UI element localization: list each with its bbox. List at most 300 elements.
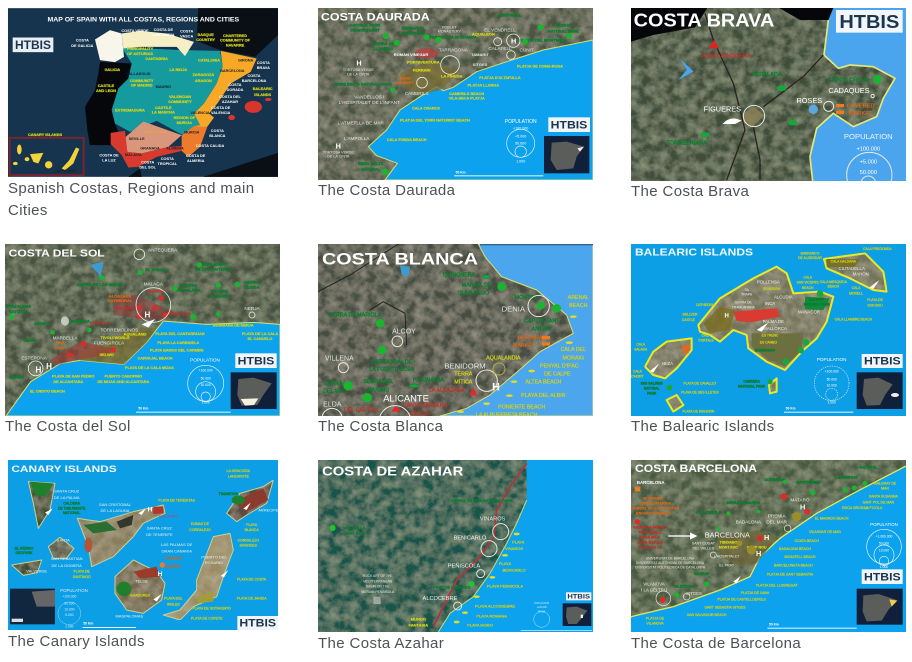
labels: towns: ANTEQUERA	[148, 248, 178, 253]
labels: beaches and parks: CASTLE	[682, 318, 696, 322]
caption: The Costa de Barcelona: The Costa de Barcelona	[631, 635, 801, 652]
labels: beaches and parks: CATHEDRAL	[696, 303, 716, 307]
scale bar	[521, 629, 592, 632]
callout: Barcelona district list: SAGRADA FAMILIA	[633, 526, 667, 530]
labels: attractions and cities: PERALADA	[752, 72, 782, 78]
labels: cities: DE LA GOMERA	[52, 563, 82, 568]
labels: nature parks: CARRASCAL DE	[371, 359, 413, 365]
labels: beaches	[387, 64, 563, 142]
labels: towns: VANDELLOS I	[354, 94, 384, 99]
labels: costas and regions: NAVARRE	[226, 43, 245, 47]
labels: beaches: SAN SALVADOR BEACH	[687, 613, 727, 617]
labels: costas and regions: SEVILLE	[129, 137, 145, 141]
labels: beaches: SANT POL DE MAR	[862, 500, 895, 504]
labels: nature parks: NATIONAL PARK	[738, 385, 766, 389]
labels: nature parks: SES SALINES	[641, 382, 663, 386]
labels: attractions and cities: TORREBRIANA	[666, 140, 707, 146]
icons: park trees	[9, 262, 240, 335]
labels: attractions and cities: +5.000	[860, 160, 877, 166]
labels: costas and regions: LA LUZ	[102, 159, 116, 163]
scale bar: 50 Km	[138, 407, 148, 411]
labels: beaches and parks: CALA PREGONDA	[863, 247, 892, 251]
labels: attractions: LA PINEDA	[441, 73, 462, 78]
labels: costas and regions: VALENCIA	[211, 111, 231, 115]
labels: costas and regions: ALMERIA	[187, 159, 205, 163]
labels: costas and regions: GIRONA	[238, 58, 254, 62]
labels: nature parks: EBRE DELTA NATURAL PARK	[335, 82, 392, 87]
labels: attractions: MARKET	[513, 343, 536, 349]
labels: attractions: AQUALANDIA	[486, 356, 521, 362]
labels: attractions and cities: POPULATION	[844, 132, 893, 141]
icons: hotels and airport: H	[35, 365, 41, 374]
labels: cities: CIUTADELLA	[838, 266, 865, 271]
labels: cities: VALVERDE	[26, 568, 47, 573]
caption: The Costa Azahar: The Costa Azahar	[318, 635, 444, 652]
labels: cities: BENIDORM	[444, 361, 486, 370]
labels: costas and regions: COSTA	[161, 157, 174, 161]
logo: HTBIS	[862, 569, 903, 584]
labels: cities	[423, 517, 506, 602]
labels: nature parks: SIERRA	[9, 374, 24, 379]
scale bar	[83, 622, 136, 628]
labels: nature parks: PARC DE LA MUNTANYA	[430, 34, 477, 39]
labels: nature parks: LLABERIA	[373, 46, 394, 51]
labels: beaches and parks: PLAYA DE CAVALLET	[683, 382, 717, 386]
labels: costas and regions: VALENCIAN	[169, 95, 191, 99]
labels: beaches and parks: ES TRENC	[762, 334, 779, 338]
legend: population	[58, 588, 88, 629]
labels: parks and beaches: EL HIERRO	[15, 546, 34, 550]
inset: Spain locator	[563, 603, 591, 626]
labels: costas and regions: COSTA DE	[211, 106, 231, 110]
labels: attractions and cities: COVERED	[847, 103, 875, 109]
labels: beaches: PLATJA DE CASTELLDEFELS	[717, 598, 767, 602]
city circles	[454, 524, 509, 610]
legend: population	[505, 119, 537, 163]
inset: Canary Islands: LAS PALMAS	[54, 169, 76, 173]
logo: HTBIS: HTBIS	[238, 355, 274, 367]
label: rock art: BASIN ON THE	[366, 585, 390, 589]
labels: beaches: PLAYA MORO	[467, 623, 493, 628]
labels: cities: DENIA	[502, 305, 526, 314]
caption: The Costa Brava: The Costa Brava	[631, 183, 749, 200]
panel: Costa Daurada map	[318, 8, 593, 180]
scale bar	[784, 407, 853, 413]
labels: costas and regions: LA RIOJA	[169, 68, 187, 72]
labels: towns: NERJA	[244, 306, 261, 311]
labels: nature parks: SERRA DEL MONTMELL	[520, 38, 567, 43]
labels: costas and regions: BARCELONA	[220, 69, 245, 73]
labels: nature parks: NATURAL PARK	[804, 303, 830, 307]
legend: population	[188, 357, 224, 405]
labels: nature and heritage: VALL DE LA	[343, 525, 366, 530]
labels: nature parks: TEJEDA	[212, 288, 228, 293]
labels: nature parks: LLEVANT	[809, 298, 824, 302]
labels: beaches: PLATJA DE COMA-RUGA	[517, 64, 563, 68]
legend: population: +100.000	[62, 594, 76, 598]
label: rock art: MEDITERRANEAN	[363, 579, 393, 583]
legend: population: 10.000	[879, 548, 889, 552]
labels: towns: EL VENDRELL	[484, 28, 516, 33]
labels: towns: POBLET	[442, 25, 457, 29]
labels: nature parks: OLERDOLA	[675, 584, 696, 588]
labels: attractions and cities: CAPOS CREUS	[828, 78, 869, 84]
heading: Costa Barcelona: COSTA BARCELONA	[635, 463, 757, 475]
labels: attractions: CATHEDRAL	[108, 298, 133, 303]
labels: attractions: SANTA BARBARA	[403, 403, 447, 409]
labels: attractions: SITGES	[473, 62, 488, 67]
labels: cities: BENICARLO	[454, 535, 487, 541]
inset: Spain locator	[231, 372, 277, 409]
legend: population: POPULATION	[505, 119, 537, 125]
icons: planes and hotels	[45, 503, 251, 602]
labels: beaches: BENICARLO	[502, 568, 526, 573]
labels: beaches: VILASSAR DE MAR	[809, 530, 841, 534]
labels: costas and regions: PRINCIPALITY	[127, 47, 154, 51]
labels: cities: PALMA DE	[763, 319, 784, 324]
labels: nature parks: OLIVA PEGO	[457, 290, 489, 296]
labels: costas and regions: BALEARIC	[253, 87, 273, 91]
inset: Spain locator	[857, 589, 903, 625]
labels: costas and regions: VALENCIA	[190, 111, 210, 115]
labels: beaches and parks: ES CARBO	[760, 340, 777, 344]
legend: population: POPULATION	[534, 602, 549, 605]
labels: cities: SERRA DE	[735, 301, 753, 305]
scale bar	[136, 407, 231, 413]
labels: beaches: PLAYA PENISCOLA	[487, 584, 523, 589]
labels: beaches: BOGATELL BEACH	[784, 555, 816, 559]
labels: nature parks: DE MALAGA	[176, 288, 201, 293]
legend: population: 1.000	[516, 159, 525, 163]
caption: Spanish Costas, Regions and main Cities	[8, 180, 254, 219]
labels: beaches: PONIENTE BEACH	[498, 404, 545, 410]
labels: cities: PREMIA	[768, 514, 786, 519]
labels: nature parks: NATURAL PARK	[349, 23, 381, 28]
labels: cities: BADALONA	[736, 520, 762, 525]
callout: Barcelona district list: UNIVERSITAT AUTONOMA DE BARCELONA	[636, 561, 705, 565]
labels: nature parks: GENAL	[23, 338, 38, 343]
labels: towns: CUNIT	[520, 48, 534, 53]
labels: cities: PUERTO DEL	[201, 555, 227, 560]
labels: cities: IBIZA	[662, 361, 673, 366]
labels: towns: TORTOSA VERDE	[343, 68, 374, 72]
labels: attractions: MARKET	[396, 80, 414, 85]
labels: costas and regions: COSTA	[257, 61, 270, 65]
labels: costas and regions: LA MANCHA	[152, 110, 175, 114]
labels: attractions and cities	[666, 40, 893, 176]
icon: hotels	[336, 37, 516, 151]
labels: beaches and parks: CALA MESQUIDA	[820, 280, 848, 284]
panel: Costa Barcelona map	[631, 460, 906, 632]
labels: costas and regions: COSTA	[211, 129, 224, 133]
heading: map title: MAP OF SPAIN WITH ALL COSTAS, REGIONS AND CITIES	[48, 16, 240, 24]
labels: costas and regions: ALMERIA	[166, 147, 184, 151]
labels: cities	[323, 305, 526, 408]
labels: costas and regions: CANTABRIA	[145, 57, 168, 61]
labels: nature parks	[675, 465, 878, 588]
labels: parks and beaches: CORRALEJO	[238, 539, 259, 543]
labels: nature parks: SERRA	[324, 381, 343, 387]
city circles	[743, 94, 892, 198]
city circles	[656, 525, 791, 606]
legend: population: +1.000.000	[876, 534, 893, 538]
labels: beaches: BURRIANA DE NERJA	[213, 323, 254, 327]
callout: Barcelona district list: UNIVERSITAT POLITECNICA DE CATALUNYA	[635, 566, 706, 570]
labels: towns: FUENGIROLA	[94, 341, 125, 346]
labels: costas and regions: ARAGON	[195, 79, 212, 83]
legend: population: POPULATION	[60, 588, 88, 593]
roads	[705, 13, 823, 180]
legend: population	[534, 602, 550, 627]
labels: beaches: VINAROS	[505, 546, 523, 551]
labels: nature parks: ANTONI	[532, 326, 552, 332]
icons: trees and planes	[650, 280, 879, 391]
labels: cities: MALLORCA	[763, 326, 787, 331]
labels: cities: ALCOY	[392, 329, 416, 336]
legend: population: +100.000	[537, 607, 547, 609]
legend: population: 1.000	[880, 565, 888, 569]
labels: beaches: LA PICOLA	[864, 506, 883, 510]
scale bar	[767, 623, 857, 629]
icons: markers: H	[756, 549, 761, 558]
labels: nature parks	[335, 13, 579, 172]
labels: beaches: PLAYA DEL CANTARRIJAN	[155, 332, 205, 336]
labels: parks and beaches: GRANDES	[240, 544, 258, 548]
labels: beaches: ROCA GROSSA	[842, 506, 869, 510]
labels: cities: SITGES	[686, 591, 702, 596]
labels: costas and regions: OF MADRID	[131, 84, 153, 88]
labels: nature parks: P. BONALBA	[413, 378, 444, 384]
labels: attractions and cities: MARKET	[849, 111, 873, 117]
scale bar: 50 Km	[456, 171, 466, 175]
labels: beaches and parks: CALA GALDANA	[831, 259, 857, 263]
legend: population: 50.000	[515, 141, 526, 145]
labels: beaches and parks: PLAYA DE	[867, 298, 884, 302]
inset: Canary Islands: DE TENERIFE	[24, 148, 47, 152]
scale bar: 50 Km	[769, 623, 779, 627]
labels: parks and beaches: GEOPARK	[15, 551, 33, 555]
labels: attractions: MONTJUIC	[719, 546, 738, 550]
callout: Barcelona district list: PARK GUELL	[638, 531, 663, 535]
labels: nature parks: MONTMELL	[499, 13, 522, 18]
icon: hotels: H	[356, 59, 362, 68]
labels: cities: DE TENERIFE	[146, 532, 173, 537]
labels: costas and regions: ISLANDS	[254, 93, 272, 97]
labels: cities	[26, 489, 279, 618]
labels: costas and regions: BRAVA	[257, 66, 270, 70]
labels: costas and regions: MADRID	[156, 85, 171, 89]
labels: attractions	[394, 32, 495, 85]
labels: costas and regions: DEL SOL	[139, 166, 157, 170]
labels: costas and regions: VALLADOLID	[126, 72, 151, 76]
caption: Spanish Costas, Regions and main Cities: Spanish Costas, Regions and main	[8, 180, 254, 197]
labels: costas and regions: COSTA DEL	[219, 95, 242, 99]
labels: parks and beaches: CALDERA	[63, 501, 81, 505]
callout: Barcelona district list: CASA MILA	[640, 536, 660, 540]
labels: nature parks: TEJEDA	[244, 284, 260, 289]
icons: planes and hotels: H	[158, 571, 163, 578]
labels: cities: DEL VALLES	[693, 546, 715, 550]
labels: towns: CAMBRILS	[405, 91, 429, 96]
labels: beaches: PLAYA	[499, 561, 511, 566]
panel: map of Spain with costas, regions and cities	[8, 8, 278, 177]
legend: population: 10.000	[201, 383, 211, 387]
labels: cities: TRAPA	[741, 293, 753, 297]
labels: beaches: SANT SEBASTIA SITGES	[705, 605, 746, 609]
heading: Costa de Azahar: COSTA DE AZAHAR	[322, 464, 463, 478]
islands	[12, 480, 273, 620]
labels: nature parks: SERRA DE MARINA	[726, 501, 761, 505]
islands	[645, 253, 887, 412]
labels: attractions: CAMP NOU	[747, 546, 767, 550]
labels: costas and regions: COSTA	[228, 83, 242, 87]
labels: cities: GRAN CANARIA	[161, 549, 192, 554]
labels: costas and regions: CANARY ISLANDS	[28, 133, 62, 137]
labels: parks and beaches: PLAYA DEL	[164, 596, 183, 600]
labels: parks and beaches: PLAYA DE TERESITAS	[158, 499, 196, 503]
labels: cities: ALCOCEBRE	[423, 596, 458, 602]
labels: attractions: ILLA	[793, 514, 801, 518]
inset: Canary Islands	[10, 138, 84, 175]
labels: cities	[641, 498, 810, 596]
labels: beaches and parks: BEACH	[828, 285, 840, 289]
labels: nature parks: DESFILADERO	[199, 262, 228, 267]
callout: Barcelona district list: UNIVERSITAT DE BARCELONA	[646, 556, 695, 560]
labels: costas and regions: AND LEON	[96, 89, 116, 93]
labels: cities: LAS PALMAS DE	[161, 542, 193, 547]
labels: attractions: OLD	[56, 339, 64, 344]
labels: beaches: PLAYA DEL ALBIR	[521, 393, 566, 399]
legend: population: POPULATION	[190, 357, 220, 362]
labels: parks and beaches: LANZAROTE	[228, 474, 249, 478]
labels: beaches: CARVAJAL BEACH	[137, 357, 173, 361]
labels: towns: L'AMPOLLA	[344, 136, 370, 141]
labels: beaches and parks: BARRANCO	[801, 251, 820, 255]
labels: attractions: TERRA	[454, 371, 473, 377]
icons: trees and planes: H	[724, 313, 729, 319]
heading: Balearic Islands: BALEARIC ISLANDS	[635, 248, 754, 259]
labels: parks and beaches: PLAYA DE JANDIA	[237, 596, 267, 600]
legend: population: 50.000	[64, 601, 75, 605]
labels: attractions: MUSEUM	[147, 288, 166, 293]
labels: towns: MONASTERY	[438, 30, 461, 34]
labels: beaches	[476, 295, 589, 418]
labels: attractions and cities: ROSES	[797, 96, 822, 105]
labels: beaches and parks: BEACH	[802, 286, 814, 290]
labels: cities: MATARO	[790, 498, 810, 503]
labels: parks and beaches: AUDITORIO	[159, 514, 178, 518]
labels: attractions	[344, 335, 543, 417]
labels: beaches: PUERTO CABOPINO	[105, 375, 142, 379]
icons: hotels and airport	[35, 311, 155, 374]
labels: beaches: DE MIJAS AND ALCANTARA	[97, 380, 150, 384]
labels: beaches	[646, 481, 899, 626]
labels: cities: ARRECIFE	[258, 507, 278, 512]
labels: beaches: PLAYA BANOS DEL CARMEN	[150, 349, 204, 353]
island detail patches	[30, 482, 268, 603]
labels: beaches	[467, 539, 526, 628]
labels: nature parks: DEL SID	[323, 388, 344, 394]
labels: nature parks: MONTGO	[515, 295, 539, 301]
legend: population: 1.000	[201, 401, 210, 405]
labels: beaches: BADALONA BEACH	[779, 547, 811, 551]
labels: parks and beaches: NATIONAL	[63, 511, 80, 515]
labels: nature parks: MONTNEGRE	[796, 480, 821, 484]
labels: parks and beaches: BLANCA	[245, 528, 259, 532]
labels: cities: DE LA PALMA	[54, 495, 80, 500]
labels: nature parks	[641, 298, 830, 395]
labels: costas and regions: COSTA	[247, 74, 261, 78]
legend: population: POPULATION	[870, 522, 898, 527]
labels: beaches: PLAYA DE LA CALA MIJAS	[125, 366, 174, 370]
heading: Canary Islands: CANARY ISLANDS	[11, 464, 117, 474]
labels: costas and regions: AZAHAR	[222, 100, 238, 104]
labels: nature parks: MAIGMO	[367, 388, 389, 394]
labels: costas and regions: BLANCA	[209, 134, 226, 138]
labels: cities: SAN CRISTOBAL	[99, 502, 132, 507]
labels: nature parks: DE LOS GAITANES	[195, 267, 232, 272]
labels: costas and regions: DE GALICIA	[71, 44, 94, 48]
labels: beaches: VILA-SECA PLATJA	[449, 97, 485, 101]
labels: cities: ROSARIO	[205, 560, 223, 565]
labels: cities: SAN SEBASTIAN	[51, 556, 83, 561]
labels: beaches: PENYAL D'IFAC	[540, 364, 579, 370]
labels: towns: DE LA CINTA	[347, 72, 370, 76]
labels: parks and beaches: DE TABURIENTE	[58, 506, 86, 510]
labels: cities: SANTA	[57, 538, 70, 543]
panel: Canary Islands map	[8, 460, 278, 630]
labels: towns: DE LA CINTA	[327, 155, 350, 159]
labels: beaches: MALGRAT DE	[874, 481, 897, 485]
labels: beaches: EL MASNOU BEACH	[815, 517, 849, 521]
legend: population: 5.000	[65, 613, 74, 617]
icons: trees and markers	[343, 275, 577, 413]
labels: parks and beaches: PLAYA DE COFETE	[191, 616, 223, 620]
heading: Costa Daurada: COSTA DAURADA	[321, 12, 430, 24]
labels: costas and regions: CASTILE	[155, 106, 172, 110]
labels: beaches and parks: DE ALGENDAR	[798, 256, 822, 260]
legend: population: POPULATION	[817, 357, 847, 362]
labels: parks and beaches: MARKET	[166, 564, 181, 568]
labels: costas and regions: GALICIA	[104, 68, 120, 72]
labels: nature parks: GARRAF	[555, 23, 572, 28]
labels: nature parks: QUINONERA	[443, 273, 476, 279]
labels: attractions	[719, 514, 801, 550]
labels: beaches and parks: PLAYA DE SES ILLETES	[681, 391, 719, 395]
labels: beaches and parks: CALA LLAMBRE BEACH	[835, 317, 873, 321]
labels: costas and regions: CASTILE	[98, 84, 115, 88]
legend: population: 1.000	[827, 401, 836, 405]
labels: attractions: REUS	[399, 75, 411, 80]
labels: nature parks: SIERRA	[34, 321, 49, 326]
labels: nature parks: SERRA DE MARIOLA	[329, 312, 382, 318]
icons: hotels and airport: H	[144, 311, 150, 320]
labels: towns: TORREMOLINOS	[100, 327, 138, 332]
labels: cities: INCA	[765, 301, 775, 306]
labels: beaches: PLATJA LLARGA	[468, 83, 499, 87]
labels: cities: POLLENSA	[757, 279, 780, 284]
labels: attractions: ALCAZABA	[109, 293, 131, 298]
caption: The Canary Islands: The Canary Islands	[8, 633, 145, 650]
labels: parks and beaches: LA GRACIOSA	[227, 469, 251, 473]
labels: nature and heritage	[343, 498, 513, 590]
labels: nature parks: LLOBREGAT	[835, 475, 859, 479]
island detail patches	[682, 259, 860, 367]
label: rock art: ROCK ART OF THE	[363, 574, 393, 578]
label: Mundo Fantasia	[408, 617, 428, 628]
labels: beaches: PLATJA DE SANT SEBASTIA	[767, 573, 814, 577]
labels: costas and regions: TROPICAL	[158, 162, 178, 166]
